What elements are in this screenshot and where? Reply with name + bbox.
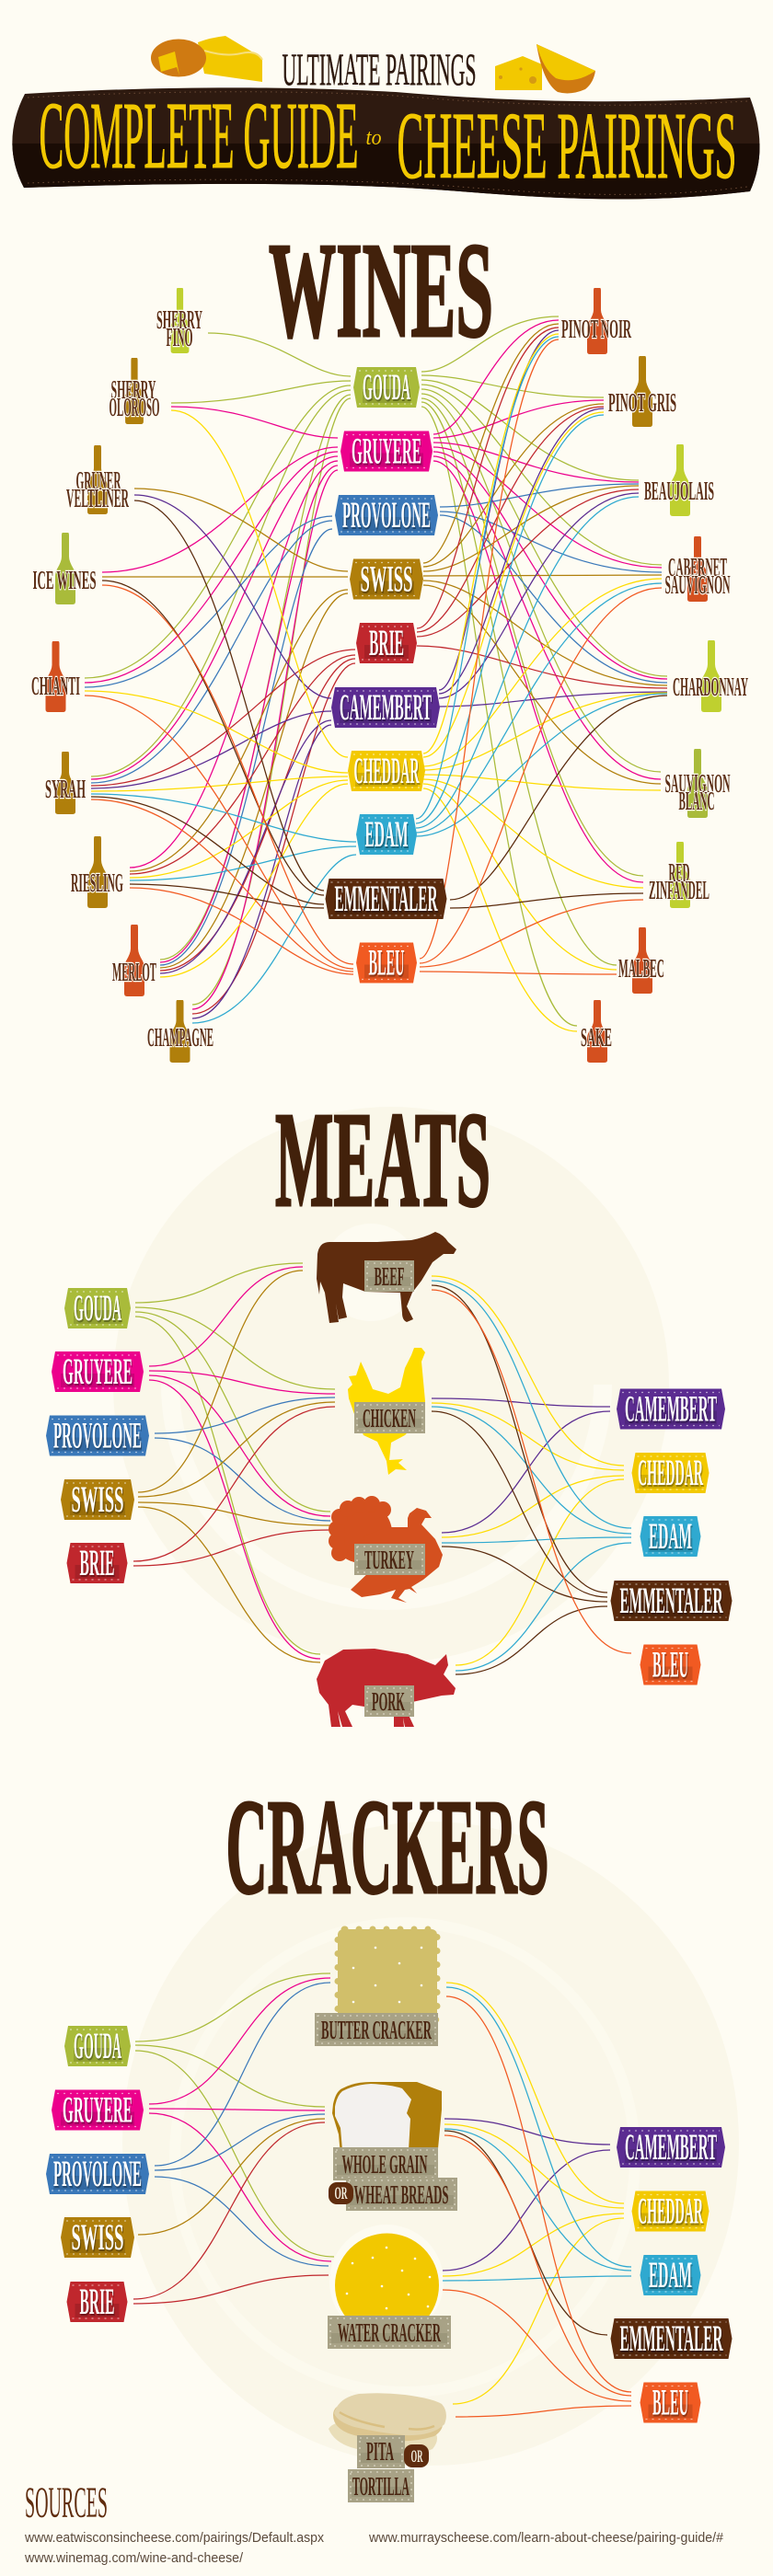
panel: wines: MERLOT xyxy=(112,958,156,987)
connector: swiss to bread xyxy=(138,2119,325,2235)
cheese badge: camembert xyxy=(331,686,440,728)
cheese badge: provolone xyxy=(335,494,438,535)
panel: wines xyxy=(31,215,748,1063)
panel: wines: ICE WINES xyxy=(33,566,96,595)
icon: cheese block and wedge xyxy=(495,44,595,93)
panel: meats: CHICKEN xyxy=(363,1404,416,1433)
connectors: gouda to crackers xyxy=(135,1973,334,2257)
source link: www.winemag.com/wine-and-cheese/ xyxy=(24,2551,244,2566)
panel: wines: RIESLING xyxy=(71,868,123,898)
cheese badge: bleu xyxy=(640,1643,701,1685)
icon: pork pig xyxy=(317,1649,456,1727)
bottle: syrah xyxy=(45,752,86,814)
cheese badge: provolone xyxy=(46,1415,149,1455)
panel: crackers: WATER CRACKER xyxy=(338,2318,441,2348)
panel: wines: PINOT NOIR xyxy=(561,315,631,344)
cheese badge: brie xyxy=(356,622,417,663)
panel: wines: MALBEC xyxy=(618,954,664,983)
cheese badge: brie xyxy=(66,1542,127,1583)
cheese badge: brie: BRIE xyxy=(369,622,404,663)
cheese badge: brie: BRIE xyxy=(79,2281,114,2322)
cheese badge: swiss xyxy=(61,1478,134,1520)
panel: meats: GOUDA xyxy=(74,1287,121,1328)
cheese badge: gouda xyxy=(64,2025,131,2066)
banner title connector: to xyxy=(366,126,381,150)
bottle: cabernet sauvignon xyxy=(664,536,731,602)
panel: wines: CHIANTI xyxy=(31,672,80,701)
bottle: beaujolais xyxy=(644,444,714,516)
connectors: wines to brie xyxy=(91,328,667,1014)
bottle: merlot xyxy=(112,925,156,996)
panel: wines: EDAM xyxy=(364,813,409,855)
icon: chicken xyxy=(348,1348,425,1475)
cheese badge: swiss xyxy=(350,558,423,600)
cheese badge: bleu xyxy=(356,942,417,983)
bottle: sherry fino: FINO xyxy=(166,323,193,352)
connectors: brie to meats xyxy=(133,1407,335,1566)
background brush blotch: crackers xyxy=(122,1822,739,2466)
badge: or: OR xyxy=(335,2184,348,2203)
icon: bread: WHOLE GRAIN xyxy=(342,2150,428,2179)
panel: crackers: GRUYERE xyxy=(63,2088,133,2131)
icon: bread xyxy=(329,2082,457,2211)
connectors: meats to emmentaler xyxy=(432,1285,607,1674)
panel: meats: GRUYERE xyxy=(63,1351,133,1392)
label: pork xyxy=(364,1685,414,1717)
bottle: chardonnay xyxy=(673,640,748,712)
icon: beef cow xyxy=(317,1232,456,1323)
cheese badge: camembert xyxy=(617,1387,725,1430)
panel: wines: CHAMPAGNE xyxy=(147,1023,213,1052)
panel: wines: CAMEMBERT xyxy=(340,686,432,728)
cheese badge: cheddar xyxy=(348,750,425,791)
cheese badge: brie xyxy=(66,2281,127,2322)
cheese badge: edam xyxy=(356,813,417,855)
bottle: sauvignon blanc: BLANC xyxy=(679,787,714,816)
panel: wines: OLOROSO xyxy=(109,393,160,422)
source link: www.eatwisconsincheese.com/pairings/Default.aspx xyxy=(24,2531,325,2546)
icon: butter cracker xyxy=(315,1929,438,2046)
label: pita: PITA xyxy=(366,2437,394,2467)
panel: wines: SHERRY xyxy=(110,375,156,405)
connectors: provolone to crackers xyxy=(155,1983,330,2266)
label: beef: BEEF xyxy=(374,1262,405,1292)
connectors: wines to swiss xyxy=(102,324,667,968)
cheese badge: bleu xyxy=(640,2381,701,2423)
connectors: meats to cheddar xyxy=(432,1276,624,1665)
cheese badge: emmentaler xyxy=(611,1580,733,1621)
connectors: wines to cheddar xyxy=(85,334,667,1031)
bottle: gruner veltliner xyxy=(66,445,129,514)
label: turkey: TURKEY xyxy=(364,1546,414,1575)
cheese badge: emmentaler xyxy=(326,878,447,919)
connectors: crackers to bleu xyxy=(443,1996,631,2417)
connectors: wines to provolone xyxy=(85,484,667,965)
connector: bread to emmentaler xyxy=(444,2131,607,2335)
cheese badge: swiss: SWISS xyxy=(72,1478,123,1520)
panel: wines: EMMENTALER xyxy=(335,878,438,919)
connectors: meats to camembert xyxy=(432,1398,610,1533)
icon: water cracker xyxy=(328,2234,451,2349)
panel: meats: MEATS xyxy=(275,1085,490,1236)
cheese badge: edam xyxy=(640,1515,701,1557)
connectors: crackers to cheddar xyxy=(443,1983,624,2404)
connectors: wines to gruyere xyxy=(85,320,667,1009)
label: pork: PORK xyxy=(372,1687,405,1717)
bottle: red zinfandel: RED xyxy=(668,858,690,888)
icon: cheese wedge and wheel xyxy=(151,36,262,82)
connectors: wines to edam xyxy=(91,337,667,1023)
bottle: red zinfandel xyxy=(649,842,710,908)
panel: wines: SAKE xyxy=(581,1023,612,1052)
bottle: pinot gris xyxy=(608,356,676,427)
panel: crackers: PROVOLONE xyxy=(53,2153,142,2194)
connectors: wines to emmentaler xyxy=(91,500,667,908)
connectors: beef to bleu xyxy=(432,1290,631,1653)
connectors: gouda to meats xyxy=(135,1263,335,1654)
cheese badge: gouda xyxy=(64,1287,131,1328)
panel: wines: CHEDDAR xyxy=(353,750,420,791)
cheese badge: cheddar xyxy=(631,2190,709,2232)
panel: wines: GRUYERE xyxy=(352,431,421,471)
cheese badge: gouda xyxy=(353,366,420,408)
cheese badge: camembert xyxy=(617,2126,725,2168)
connectors: crackers to camembert xyxy=(443,2119,610,2271)
connectors: gruyere to meats xyxy=(149,1267,335,1659)
connectors: gruyere to crackers xyxy=(149,1978,331,2261)
connectors: swiss to meats xyxy=(138,1271,335,1662)
panel: crackers: GOUDA xyxy=(74,2025,121,2066)
panel: wines: PINOT GRIS xyxy=(608,388,676,418)
cheese badge: provolone xyxy=(46,2153,149,2194)
connectors: wines to gouda xyxy=(85,316,667,1026)
background brush blotch: meats xyxy=(113,1107,669,1662)
bottle: riesling xyxy=(71,836,123,908)
panel: crackers: BLEU xyxy=(652,2381,688,2423)
icon: turkey xyxy=(329,1496,443,1603)
panel: wines: GOUDA xyxy=(363,366,410,408)
badge: or: OR xyxy=(410,2447,423,2467)
connectors: wines to bleu xyxy=(85,339,662,974)
panel: sources xyxy=(24,2478,723,2566)
panel: wines: BLEU xyxy=(368,942,405,983)
connectors: brie to crackers xyxy=(133,2122,329,2304)
cheese badge: swiss: SWISS xyxy=(361,558,412,600)
panel: header xyxy=(12,36,760,199)
panel: wines: SYRAH xyxy=(45,775,86,804)
cheese badge: gruyere xyxy=(340,431,433,471)
icon: pita stack xyxy=(329,2393,446,2502)
cheese badge: cheddar xyxy=(631,1452,709,1493)
bottle: sake xyxy=(581,1000,612,1063)
cheese badge: gruyere xyxy=(52,2088,144,2131)
connectors: wines to camembert xyxy=(91,330,667,1018)
panel: meats: EDAM xyxy=(649,1515,692,1557)
panel: crackers: BUTTER CRACKER xyxy=(321,2016,432,2045)
label: beef xyxy=(364,1260,414,1292)
bottle: pinot noir xyxy=(561,288,631,354)
panel: meats xyxy=(46,1085,733,1727)
panel: wines: GRUNER xyxy=(75,466,121,496)
panel: crackers: EDAM xyxy=(649,2254,692,2295)
panel: crackers xyxy=(46,1772,739,2502)
panel: header: ULTIMATE PAIRINGS xyxy=(282,43,477,95)
panel: wines: SHERRY xyxy=(156,305,202,335)
bottle: champagne xyxy=(147,1000,213,1063)
bottle: ice wines xyxy=(33,533,96,604)
panel: meats: BLEU xyxy=(652,1643,688,1685)
bottle: malbec xyxy=(618,927,664,994)
panel: wines: VELTLINER xyxy=(66,484,129,513)
panel: sources: SOURCES xyxy=(25,2478,108,2527)
bottle: sherry oloroso xyxy=(109,358,160,424)
bottle: sauvignon blanc xyxy=(664,749,731,818)
cheese badge: swiss: SWISS xyxy=(72,2216,123,2258)
cheese badge: edam xyxy=(640,2254,701,2295)
panel: meats: PROVOLONE xyxy=(53,1415,142,1455)
bottle: sherry fino xyxy=(156,288,202,353)
cheese badge: emmentaler xyxy=(611,2317,733,2359)
connectors: provolone to meats xyxy=(155,1397,335,1521)
cheese badge: swiss xyxy=(61,2216,134,2258)
source link: www.murrayscheese.com/learn-about-cheese/pairing-guide/# xyxy=(368,2531,723,2546)
connectors: meats to edam xyxy=(432,1281,631,1671)
panel: crackers: WHEAT BREADS xyxy=(353,2180,449,2210)
icon: pita stack: TORTILLA xyxy=(352,2472,410,2501)
cheese badge: brie: BRIE xyxy=(79,1542,114,1583)
panel: wines: PROVOLONE xyxy=(342,494,431,535)
cheese badge: gruyere xyxy=(52,1351,144,1392)
panel: wines: WINES xyxy=(269,215,493,366)
bottle: chianti xyxy=(31,641,80,712)
connectors: crackers to edam xyxy=(443,1987,631,2281)
